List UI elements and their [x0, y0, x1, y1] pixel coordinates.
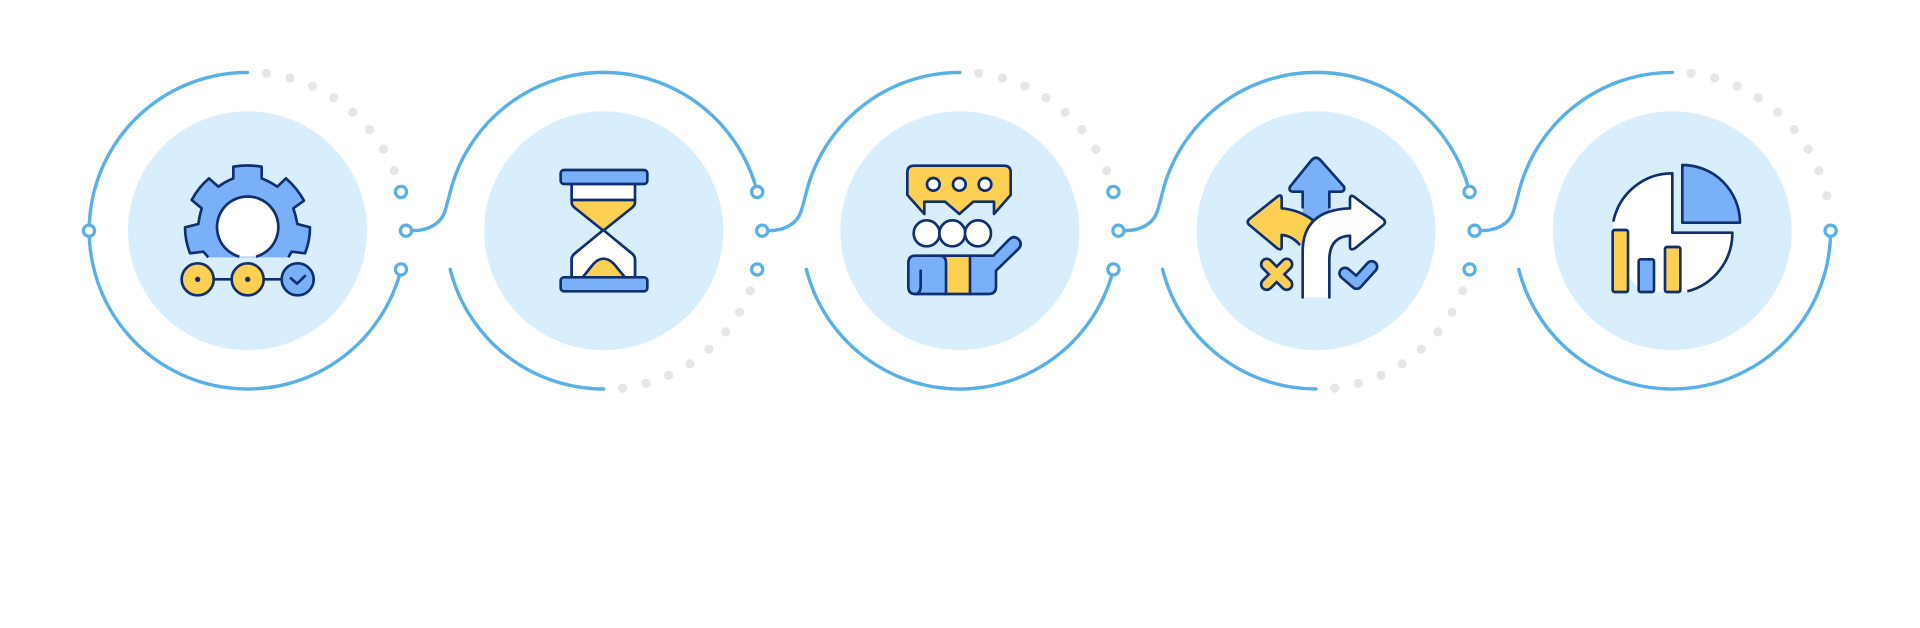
dotted arc 4	[1330, 286, 1467, 393]
wave connector and top arc 4	[1124, 72, 1470, 231]
bottom arc 5	[1519, 231, 1831, 389]
icon: pie chart and bars	[1613, 165, 1740, 292]
panel: step 1 gear workflow	[83, 69, 412, 389]
connector nodes 3	[1108, 186, 1124, 275]
connector nodes 2	[752, 186, 768, 275]
wave connector and top arc 3	[768, 72, 960, 231]
bottom arc 3	[806, 269, 1113, 389]
dotted arc 3	[974, 69, 1111, 175]
icon: gear with process steps	[182, 165, 314, 295]
background disc 1	[128, 111, 367, 350]
background disc 2	[484, 111, 723, 350]
panel: step 3 team discussion	[768, 69, 1124, 389]
dotted arc 2	[618, 286, 755, 393]
dotted arc 5	[1686, 69, 1831, 200]
wave connector and top arc 5	[1481, 72, 1672, 231]
connector node 5	[1825, 225, 1836, 236]
outer ring 1	[89, 72, 401, 389]
bottom arc 4	[1163, 269, 1316, 389]
icon: forking arrows with cross and check	[1248, 158, 1385, 297]
background disc 4	[1197, 111, 1436, 350]
icon: team with speech bubble	[907, 166, 1021, 294]
icon: hourglass	[561, 170, 647, 291]
dotted arc 1	[262, 69, 399, 175]
connector nodes 1	[83, 186, 412, 275]
background disc 3	[840, 111, 1079, 350]
bottom arc 2	[450, 269, 604, 389]
panel: step 5 charts	[1481, 69, 1836, 389]
connector nodes 4	[1464, 186, 1480, 275]
wave connector and top arc 2	[412, 72, 757, 231]
background disc 5	[1553, 111, 1792, 350]
panel: step 4 decision arrows	[1124, 72, 1480, 393]
panel: step 2 hourglass	[412, 72, 768, 393]
